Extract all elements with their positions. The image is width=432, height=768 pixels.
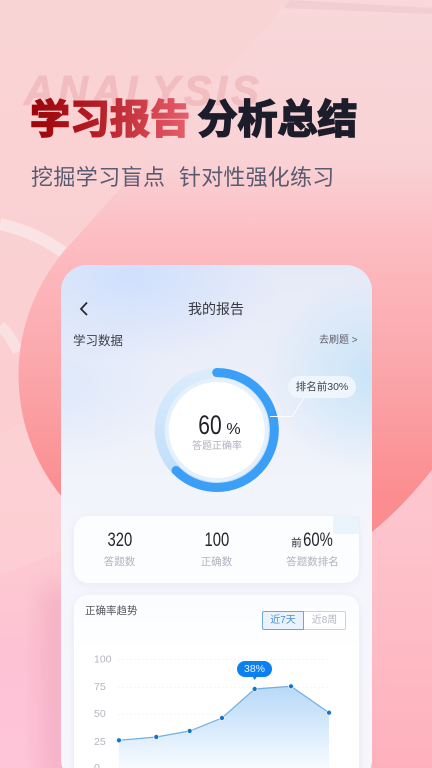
heading: title: 分析总结 (198, 98, 358, 142)
stat: correct: 正确数 (201, 556, 232, 568)
link: go practice: 去刷题 > (319, 335, 358, 346)
stat: total answered: 答题数 (104, 556, 135, 568)
chart: area trend: 50 (94, 708, 106, 720)
chart: area trend (94, 654, 332, 768)
label: accuracy: 答题正确率 (192, 441, 242, 452)
section title: study data: 学习数据 (73, 334, 123, 348)
stat: total answered (104, 530, 135, 568)
subtitle: 挖掘学习盲点 (31, 165, 165, 190)
tab: 7 days (262, 611, 304, 630)
callout: rank top 30%: 排名前30% (296, 381, 348, 393)
screen title: 我的报告 (188, 301, 244, 317)
stat: ranking (286, 530, 339, 568)
callout line (270, 398, 304, 417)
chart: area trend: 100 (94, 654, 112, 666)
panel: trend chart (74, 595, 359, 768)
tooltip: 38% (237, 661, 272, 677)
tab: 7 days: 近7天 (270, 615, 296, 626)
tooltip: 38%: 38% (244, 663, 265, 675)
stat: correct (201, 530, 232, 568)
stat: ranking: 答题数排名 (286, 556, 339, 568)
chart: area trend: 75 (94, 681, 106, 693)
decorative tag on stats card (333, 516, 360, 534)
tab: 8 weeks (304, 611, 346, 630)
stat: total answered: 320 (107, 530, 132, 551)
subtitle second part: 针对性强化练习 (179, 165, 334, 190)
value: 60%: % (226, 421, 241, 438)
stat: ranking: 60% (303, 530, 333, 551)
chart: accuracy ring (154, 368, 279, 492)
heading: title: 学习报告 (30, 98, 190, 142)
watermark: ANALYSIS: ANALYSIS (24, 67, 263, 114)
stat: correct: 100 (204, 530, 229, 551)
stat: ranking: 前 (291, 537, 302, 549)
chart title: 正确率趋势 (85, 605, 138, 617)
icon: back arrow (80, 302, 88, 316)
heading: title (30, 98, 358, 142)
value: 60% (199, 410, 241, 440)
value: 60%: 60 (199, 410, 222, 440)
panel: stats (74, 516, 359, 583)
chart: area trend: 25 (94, 736, 106, 748)
panel: phone screen (61, 265, 372, 768)
callout: rank top 30% (288, 376, 356, 398)
screen tint (61, 265, 372, 525)
tab: 8 weeks: 近8周 (312, 615, 337, 626)
